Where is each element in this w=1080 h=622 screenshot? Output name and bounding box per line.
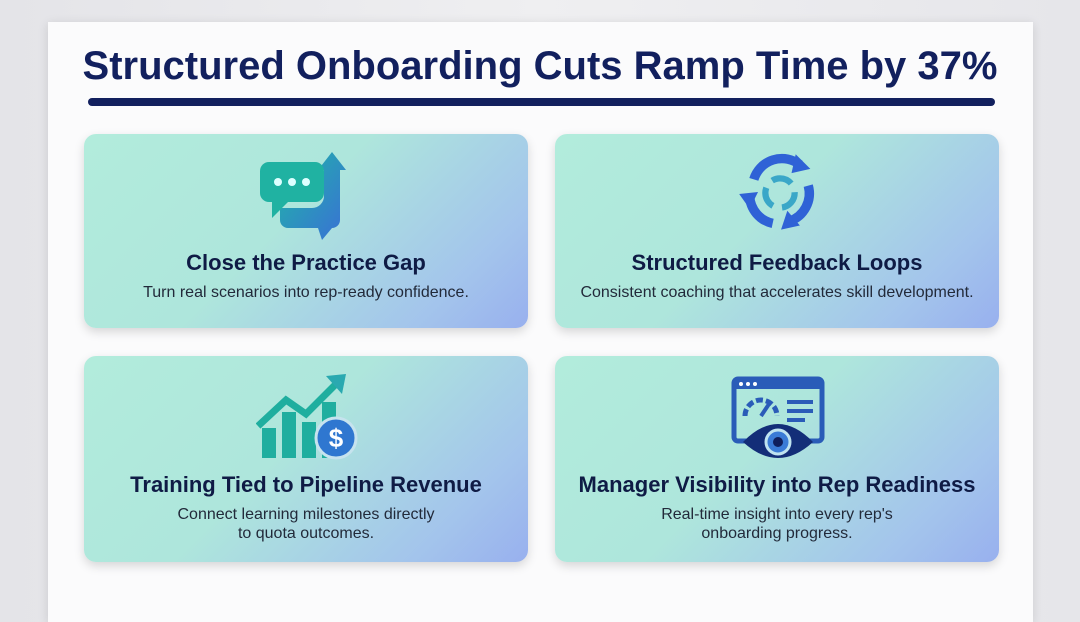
text: to quota outcomes. [238,525,374,542]
title: Structured Onboarding Cuts Ramp Time by 37% [83,44,997,88]
text: Turn real scenarios into rep-ready confidence. [143,284,469,301]
text [177,506,434,542]
icon: cycle arrows [739,154,814,230]
icon: dashboard eye [732,376,824,458]
text: onboarding progress. [701,525,853,542]
heading: Close the Practice Gap [186,250,426,275]
text: Connect learning milestones directly [177,506,434,523]
heading: Manager Visibility into Rep Readiness [579,472,975,497]
panel: feedback loops [555,134,999,328]
icon: chat arrow [260,152,346,240]
text: Real-time insight into every rep's [661,506,893,523]
panel: practice gap [84,134,528,328]
panel: manager visibility [555,356,999,562]
title underline [88,98,995,106]
icon: growth chart: $ [329,423,344,453]
heading: Structured Feedback Loops [632,250,922,275]
icon: growth chart [256,374,358,460]
panel: pipeline revenue [84,356,528,562]
text [661,506,893,542]
text: Consistent coaching that accelerates skill development. [580,284,974,301]
heading: Training Tied to Pipeline Revenue [130,472,482,497]
